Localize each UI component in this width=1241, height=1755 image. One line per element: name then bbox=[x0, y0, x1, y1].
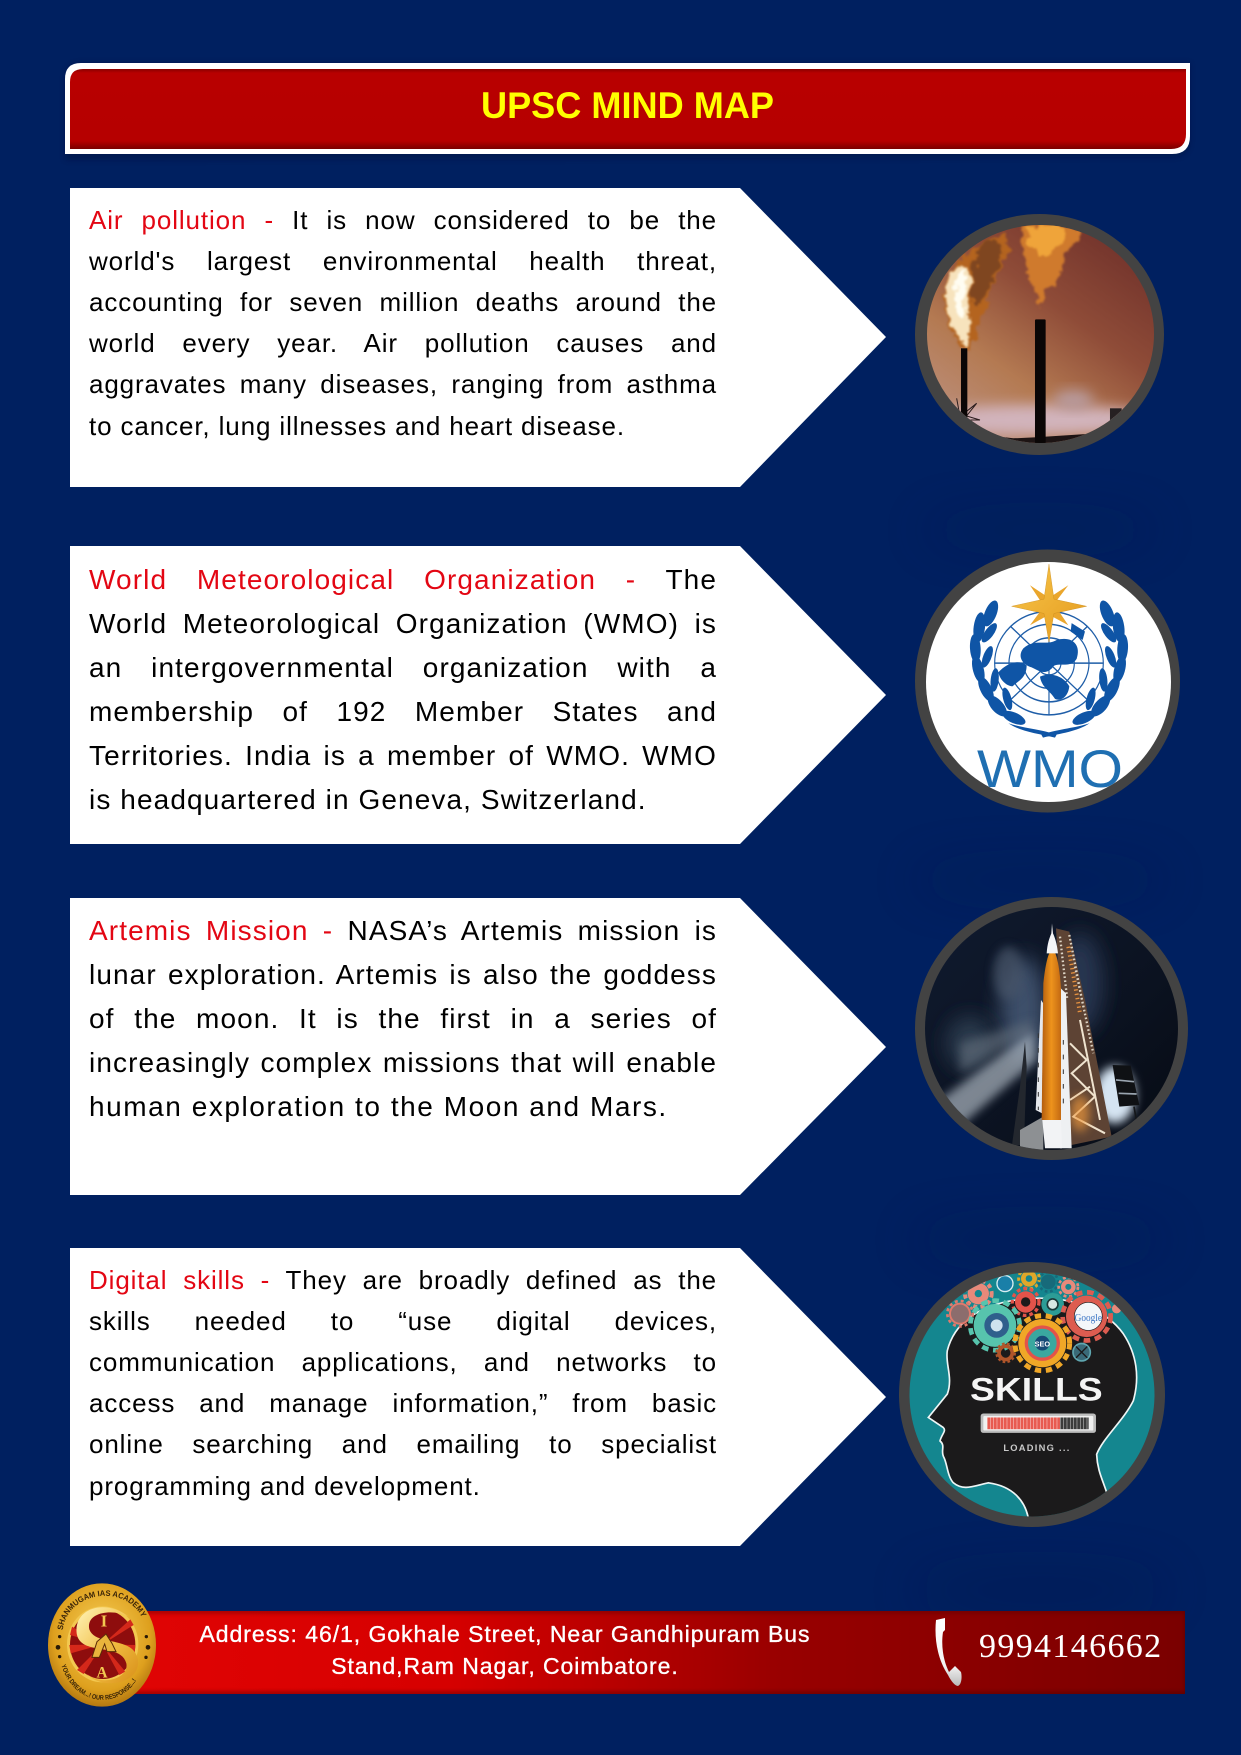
text: loading: LOADING ... bbox=[1003, 1443, 1069, 1453]
text: google: Google bbox=[1075, 1312, 1102, 1324]
text: digital skills: programming and development. bbox=[89, 1471, 481, 1501]
text: air pollution: world's largest environmental health threat, bbox=[89, 246, 717, 276]
text: artemis mission: lunar exploration. Artemis is also the goddess bbox=[89, 959, 717, 990]
panel: world meteorological organization bbox=[70, 546, 886, 844]
panel: artemis mission bbox=[70, 898, 886, 1195]
text: air pollution bbox=[89, 204, 717, 441]
laurel wreath right bbox=[1041, 597, 1129, 738]
panel: digital skills bbox=[70, 1248, 886, 1546]
footer bar bbox=[130, 1611, 1185, 1694]
gears bbox=[947, 1268, 1121, 1371]
image: skills head with gears bbox=[899, 1262, 1165, 1527]
icon: gold compass star bbox=[1012, 564, 1087, 642]
text: world meteorological organization: membership of 192 Member States and bbox=[89, 696, 717, 726]
text: seal bottom arc: YOUR DREAM...! OUR RESPONSE...! bbox=[62, 1664, 136, 1700]
laurel wreath left bbox=[969, 597, 1057, 738]
text: SEO: SEO bbox=[1035, 1339, 1050, 1349]
address text: Address: 46/1, Gokhale Street, Near Gandhipuram Bus bbox=[200, 1621, 810, 1647]
text: artemis mission: of the moon. It is the first in a series of bbox=[89, 1003, 717, 1034]
title text: UPSC MIND MAP bbox=[481, 85, 774, 126]
text: digital skills: access and manage information,” from basic bbox=[89, 1388, 717, 1418]
image: artemis rocket on launch pad bbox=[915, 897, 1188, 1160]
text: world meteorological organization: is headquartered in Geneva, Switzerland. bbox=[89, 784, 647, 814]
text: air pollution: aggravates many diseases, ranging from asthma bbox=[89, 369, 717, 399]
text: digital skills bbox=[89, 1264, 717, 1501]
text: WMO: WMO bbox=[977, 740, 1123, 799]
text: world meteorological organization: Territories. India is a member of WMO. WMO bbox=[89, 740, 717, 770]
text: digital skills: online searching and emailing to specialist bbox=[89, 1429, 717, 1459]
loading bar bbox=[981, 1413, 1096, 1433]
text: SKILLS: SKILLS bbox=[970, 1371, 1103, 1407]
text: seal letter I: I bbox=[101, 1612, 107, 1631]
phone number: 9994146662 bbox=[979, 1628, 1162, 1665]
image: factory chimneys with smoke bbox=[915, 214, 1164, 455]
text: artemis mission: Artemis Mission - NASA’s Artemis mission is bbox=[89, 915, 717, 946]
text: air pollution: world every year. Air pollution causes and bbox=[89, 328, 717, 358]
panel: air pollution bbox=[70, 188, 886, 487]
text: seal top arc: SHANMUGAM IAS ACADEMY bbox=[58, 1590, 147, 1630]
text: digital skills: skills needed to “use digital devices, bbox=[89, 1306, 717, 1336]
text: artemis mission: increasingly complex missions that will enable bbox=[89, 1047, 717, 1078]
text: artemis mission: human exploration to the Moon and Mars. bbox=[89, 1091, 668, 1122]
address text: Stand,Ram Nagar, Coimbatore. bbox=[331, 1653, 679, 1679]
text: world meteorological organization bbox=[89, 564, 717, 815]
icon: telephone handset bbox=[936, 1618, 962, 1686]
logo: shanmugam ias academy seal bbox=[48, 1583, 156, 1707]
image: WMO emblem bbox=[915, 550, 1180, 812]
text: world meteorological organization: an intergovernmental organization with a bbox=[89, 652, 717, 682]
text: air pollution: Air pollution - It is now considered to be the bbox=[89, 204, 717, 234]
text: air pollution: accounting for seven million deaths around the bbox=[89, 287, 717, 317]
text: digital skills: Digital skills - They are broadly defined as the bbox=[89, 1264, 717, 1294]
text: air pollution: to cancer, lung illnesses and heart disease. bbox=[89, 411, 625, 441]
text: world meteorological organization: World Meteorological Organization (WMO) is bbox=[89, 608, 717, 638]
text: seal letter A: A bbox=[96, 1664, 108, 1681]
title banner bbox=[65, 63, 1190, 160]
text: world meteorological organization: World Meteorological Organization - The bbox=[89, 564, 717, 594]
text: digital skills: communication applications, and networks to bbox=[89, 1347, 717, 1377]
address text bbox=[199, 1621, 810, 1680]
text: artemis mission bbox=[89, 915, 717, 1122]
